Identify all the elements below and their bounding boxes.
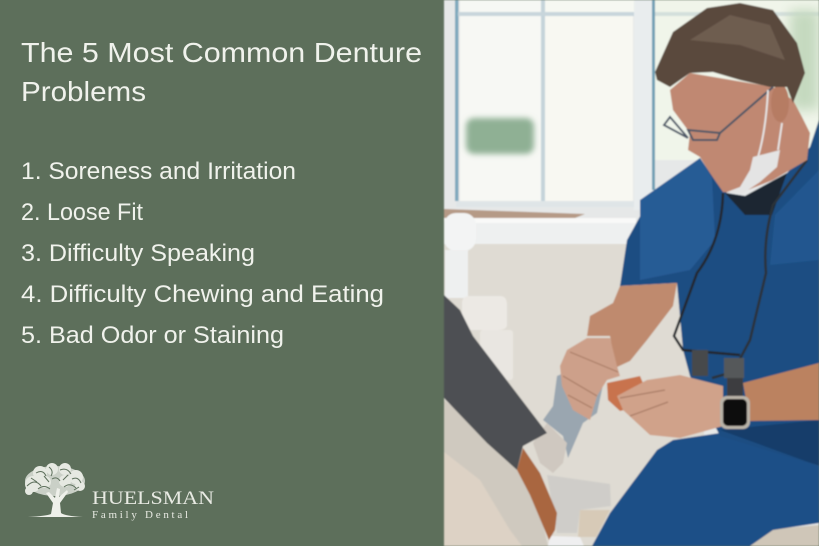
patient sock (533, 423, 567, 473)
list: five denture problems: 1. Soreness and Irritation (21, 158, 296, 185)
watch (720, 378, 750, 429)
patient and dental chair (444, 295, 611, 546)
glasses (664, 87, 773, 140)
chair foot support (547, 475, 611, 533)
seat (750, 525, 819, 546)
title (21, 37, 422, 107)
list: five denture problems (21, 158, 384, 349)
right hand (617, 375, 723, 438)
left hand (560, 338, 620, 420)
list: five denture problems: 5. Bad Odor or Staining (21, 322, 284, 349)
icon: tree (25, 463, 85, 517)
face (670, 73, 810, 193)
panel: green text background (0, 0, 444, 546)
dental loupes and lanyard (674, 160, 807, 378)
forearm (743, 363, 819, 421)
hair (655, 3, 805, 103)
patient shorts (444, 295, 547, 470)
wordmark: HUELSMAN (92, 488, 214, 509)
face mask (727, 90, 782, 194)
tagline: Family Dental (92, 509, 188, 521)
title: Problems (21, 76, 146, 107)
patient leg (517, 448, 557, 540)
window and wall background (444, 0, 819, 546)
dentist (560, 3, 819, 546)
logo: Huelsman Family Dental (25, 463, 214, 521)
chair back (444, 400, 548, 546)
upper arm (587, 283, 677, 368)
list: five denture problems: 2. Loose Fit (21, 199, 143, 226)
scrub top (620, 120, 819, 466)
photo: dentist showing denture to patient (444, 0, 819, 546)
title: The 5 Most Common Denture (21, 37, 422, 68)
pants (592, 433, 819, 546)
list: five denture problems: 3. Difficulty Speaking (21, 240, 255, 267)
ear (771, 84, 789, 122)
denture (607, 376, 645, 411)
list: five denture problems: 4. Difficulty Chewing and Eating (21, 281, 384, 308)
patient shoe (543, 372, 604, 458)
